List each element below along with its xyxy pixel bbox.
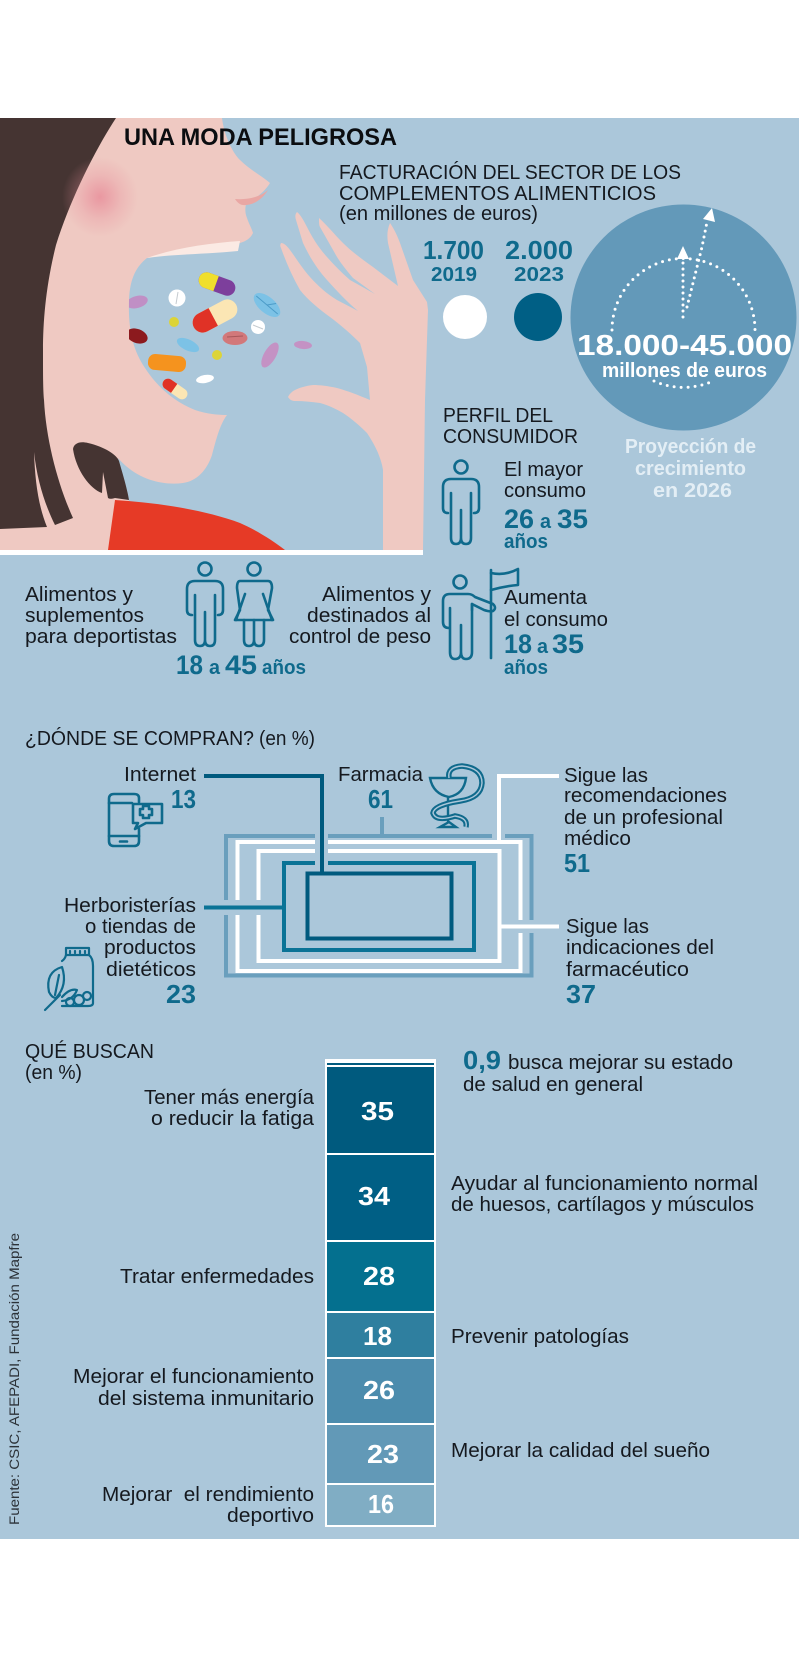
label: farmacia bbox=[338, 763, 424, 814]
rect: teal 23 bbox=[284, 863, 474, 950]
label: 0,9 salud general: busca mejorar su estado bbox=[508, 1051, 733, 1074]
segment 23 bbox=[327, 1425, 434, 1483]
title: UNA MODA PELIGROSA bbox=[124, 124, 397, 151]
label: prevenir patologías: Prevenir patologías bbox=[451, 1325, 629, 1348]
label: indicaciones: 37 bbox=[566, 979, 596, 1009]
label: farmacia: Farmacia bbox=[338, 763, 424, 786]
label: 0,9 salud general: de salud en general bbox=[463, 1073, 643, 1096]
label: rendimiento bbox=[102, 1483, 314, 1527]
text: aumenta el consumo: a bbox=[537, 635, 549, 658]
text: mayor consumo: El mayor bbox=[504, 458, 583, 481]
pill: white small bbox=[251, 320, 265, 334]
back hair strand bbox=[73, 442, 129, 500]
teeth bbox=[147, 241, 240, 258]
label: herboristerías: Herboristerías bbox=[64, 894, 196, 917]
label: internet: 13 bbox=[171, 784, 196, 814]
rect: dark 13 bbox=[308, 874, 452, 938]
heading: perfil del consumidor: PERFIL DEL bbox=[443, 404, 553, 427]
age range 18 a 45: a bbox=[209, 656, 221, 679]
value 2019: 2019 bbox=[431, 263, 477, 286]
pill: yellow small 2 bbox=[212, 350, 222, 360]
label: farmacia: 61 bbox=[368, 784, 393, 814]
projection caption: en 2026 bbox=[653, 479, 732, 502]
white strip under illustration bbox=[0, 550, 423, 555]
age range 18 a 45: años bbox=[262, 656, 306, 679]
hair bbox=[0, 118, 116, 529]
segment 16: 16 bbox=[368, 1489, 394, 1519]
label: herboristerías: 23 bbox=[166, 979, 196, 1009]
label: indicaciones: Sigue las bbox=[566, 915, 649, 938]
connector: herboristerías bbox=[204, 906, 284, 910]
pill: white oval bbox=[195, 373, 215, 385]
dotted arrow lower bbox=[677, 246, 689, 317]
segment 28 bbox=[327, 1242, 434, 1311]
text: control de peso: control de peso bbox=[289, 625, 431, 648]
label: energía: o reducir la fatiga bbox=[151, 1107, 315, 1130]
text: mayor consumo: años bbox=[504, 530, 548, 553]
label: 0,9 salud general bbox=[463, 1045, 733, 1096]
heading: dónde se compran: ¿DÓNDE SE COMPRAN? bbox=[25, 727, 254, 750]
pill: small purple bbox=[294, 340, 312, 350]
pill: orange bbox=[147, 353, 187, 373]
text: aumenta el consumo bbox=[504, 586, 608, 679]
value 2023 bbox=[505, 235, 573, 286]
column frame bbox=[325, 1059, 436, 1527]
label: recomendaciones: Sigue las bbox=[564, 764, 648, 787]
label: huesos bbox=[451, 1172, 758, 1216]
label: recomendaciones: médico bbox=[564, 827, 631, 850]
heading: facturación: FACTURACIÓN DEL SECTOR DE LOS bbox=[339, 161, 681, 184]
segment 0,9 bbox=[327, 1063, 434, 1065]
age range 18 a 45: 18 bbox=[176, 650, 203, 680]
label: huesos: Ayudar al funcionamiento normal bbox=[451, 1172, 758, 1195]
heading: qué buscan bbox=[25, 1040, 154, 1084]
icon: woman bbox=[235, 562, 273, 646]
nested rectangles diagram bbox=[204, 776, 559, 976]
label: energía: Tener más energía bbox=[144, 1086, 315, 1109]
text: deportistas: Alimentos y bbox=[25, 583, 134, 606]
circle 2023 bbox=[514, 293, 562, 341]
heading: perfil del consumidor: CONSUMIDOR bbox=[443, 425, 578, 448]
label: tratar enfermedades: Tratar enfermedades bbox=[120, 1265, 314, 1288]
illustration: woman swallowing pills bbox=[0, 118, 428, 555]
value 2023: 2023 bbox=[514, 263, 564, 286]
text: mayor consumo: a bbox=[540, 510, 552, 533]
text: aumenta el consumo: años bbox=[504, 656, 548, 679]
icon: man bbox=[187, 562, 223, 646]
text: control de peso: Alimentos y bbox=[322, 583, 432, 606]
label: inmunitario bbox=[73, 1365, 314, 1410]
projection caption: crecimiento bbox=[635, 457, 746, 480]
pill: purple oval bbox=[258, 340, 282, 370]
segment 16 bbox=[327, 1485, 434, 1525]
text: control de peso bbox=[289, 583, 432, 648]
pills bbox=[129, 296, 148, 344]
label: inmunitario: del sistema inmunitario bbox=[98, 1387, 314, 1410]
heading: dónde se compran: (en %) bbox=[259, 727, 315, 750]
projection value: 18.000-45.000 bbox=[577, 330, 792, 362]
text: aumenta el consumo: el consumo bbox=[504, 608, 608, 631]
label: recomendaciones: 51 bbox=[564, 848, 590, 878]
pill: yellow and purple capsule bbox=[196, 270, 238, 298]
pill: small red capsule bbox=[160, 376, 190, 402]
label: calidad del sueño: Mejorar la calidad del sueño bbox=[451, 1439, 710, 1462]
projection unit: millones de euros bbox=[602, 359, 767, 382]
rect: white 37 bbox=[258, 851, 500, 961]
blush bbox=[62, 157, 138, 237]
source: Fuente: CSIC, AFEPADI, Fundación Mapfre bbox=[7, 1233, 22, 1525]
label: herboristerías: productos bbox=[104, 936, 196, 959]
dotted arrow upper bbox=[687, 208, 715, 307]
text: deportistas: suplementos bbox=[25, 604, 144, 627]
text: deportistas: para deportistas bbox=[25, 625, 177, 648]
label: herboristerías bbox=[64, 894, 196, 1009]
icon: supplement jar with leaves bbox=[45, 948, 93, 1010]
label: herboristerías: o tiendas de bbox=[85, 915, 196, 938]
segment 26: 26 bbox=[363, 1375, 395, 1405]
text: aumenta el consumo: 18 bbox=[504, 629, 532, 659]
value 2019 bbox=[423, 235, 484, 286]
label: indicaciones: indicaciones del bbox=[566, 936, 714, 959]
connector: farmacia bbox=[380, 817, 384, 836]
projection caption bbox=[625, 435, 756, 502]
segment 34: 34 bbox=[358, 1181, 391, 1211]
text: mayor consumo bbox=[504, 458, 588, 553]
icon: phone with medical message bbox=[109, 794, 162, 846]
pill: blue tablet bbox=[250, 289, 284, 321]
label: recomendaciones bbox=[564, 764, 727, 878]
pill: purple cut tablet bbox=[129, 296, 148, 308]
rect: white 51 bbox=[238, 842, 520, 971]
text: deportistas bbox=[25, 583, 177, 648]
connector: internet bbox=[204, 776, 322, 873]
connector: indicaciones bbox=[500, 924, 559, 928]
label: energía bbox=[144, 1086, 315, 1130]
heading: qué buscan: (en %) bbox=[25, 1061, 82, 1084]
nose shadow bbox=[235, 190, 268, 205]
label: recomendaciones: de un profesional bbox=[564, 806, 723, 829]
heading: facturación bbox=[339, 161, 681, 225]
segment 26 bbox=[327, 1359, 434, 1423]
pill: dark red tablet bbox=[129, 328, 148, 344]
segment 18 bbox=[327, 1313, 434, 1357]
text: aumenta el consumo: 35 bbox=[552, 629, 584, 659]
segment 34 bbox=[327, 1155, 434, 1240]
value 2019: 1.700 bbox=[423, 235, 484, 265]
rect: outer light blue bbox=[226, 836, 532, 976]
text: aumenta el consumo: Aumenta bbox=[504, 586, 588, 609]
icon: person bbox=[443, 460, 479, 544]
stacked column chart bbox=[325, 1059, 436, 1527]
face and neck bbox=[0, 118, 270, 550]
text: control de peso: destinados al bbox=[307, 604, 431, 627]
heading: qué buscan: QUÉ BUSCAN bbox=[25, 1040, 154, 1063]
label: rendimiento: Mejorar el rendimiento bbox=[102, 1483, 314, 1506]
dotted gauge bbox=[612, 258, 755, 387]
pill: rose bbox=[222, 331, 248, 345]
pill: red and cream capsule bbox=[189, 296, 241, 336]
segment 35 bbox=[327, 1067, 434, 1153]
pill: blue small bbox=[175, 335, 201, 355]
label: indicaciones: farmacéutico bbox=[566, 958, 689, 981]
icon: bowl of hygieia bbox=[430, 766, 482, 827]
label: internet bbox=[124, 763, 196, 814]
label: huesos: de huesos, cartílagos y músculos bbox=[451, 1193, 754, 1216]
label: internet: Internet bbox=[124, 763, 196, 786]
label: indicaciones bbox=[566, 915, 714, 1009]
label: rendimiento: deportivo bbox=[227, 1504, 314, 1527]
age range 18 a 45 bbox=[176, 650, 306, 680]
segment 18: 18 bbox=[363, 1321, 392, 1351]
circle 2019 bbox=[443, 295, 487, 339]
label: herboristerías: dietéticos bbox=[106, 958, 196, 981]
heading: perfil del consumidor bbox=[443, 404, 578, 448]
heading: facturación: (en millones de euros) bbox=[339, 202, 538, 225]
age range 18 a 45: 45 bbox=[225, 650, 257, 680]
value 2023: 2.000 bbox=[505, 235, 573, 265]
text: mayor consumo: 35 bbox=[557, 504, 588, 534]
segment 23: 23 bbox=[367, 1439, 399, 1469]
heading: facturación: COMPLEMENTOS ALIMENTICIOS bbox=[339, 182, 656, 205]
text: mayor consumo: 26 bbox=[504, 504, 534, 534]
pill: white round bbox=[168, 290, 186, 306]
connector: recomendaciones bbox=[499, 776, 559, 842]
hand bbox=[280, 212, 428, 550]
icon: person with flag bbox=[443, 569, 518, 659]
red top bbox=[108, 500, 285, 550]
segment 35: 35 bbox=[361, 1096, 394, 1126]
label: 0,9 salud general: 0,9 bbox=[463, 1045, 501, 1075]
segment 28: 28 bbox=[363, 1261, 395, 1291]
text: mayor consumo: consumo bbox=[504, 479, 586, 502]
pill: yellow small 1 bbox=[169, 317, 179, 327]
label: recomendaciones: recomendaciones bbox=[564, 784, 727, 807]
label: inmunitario: Mejorar el funcionamiento bbox=[73, 1365, 314, 1388]
projection circle bbox=[570, 204, 796, 430]
projection caption: Proyección de bbox=[625, 435, 756, 458]
